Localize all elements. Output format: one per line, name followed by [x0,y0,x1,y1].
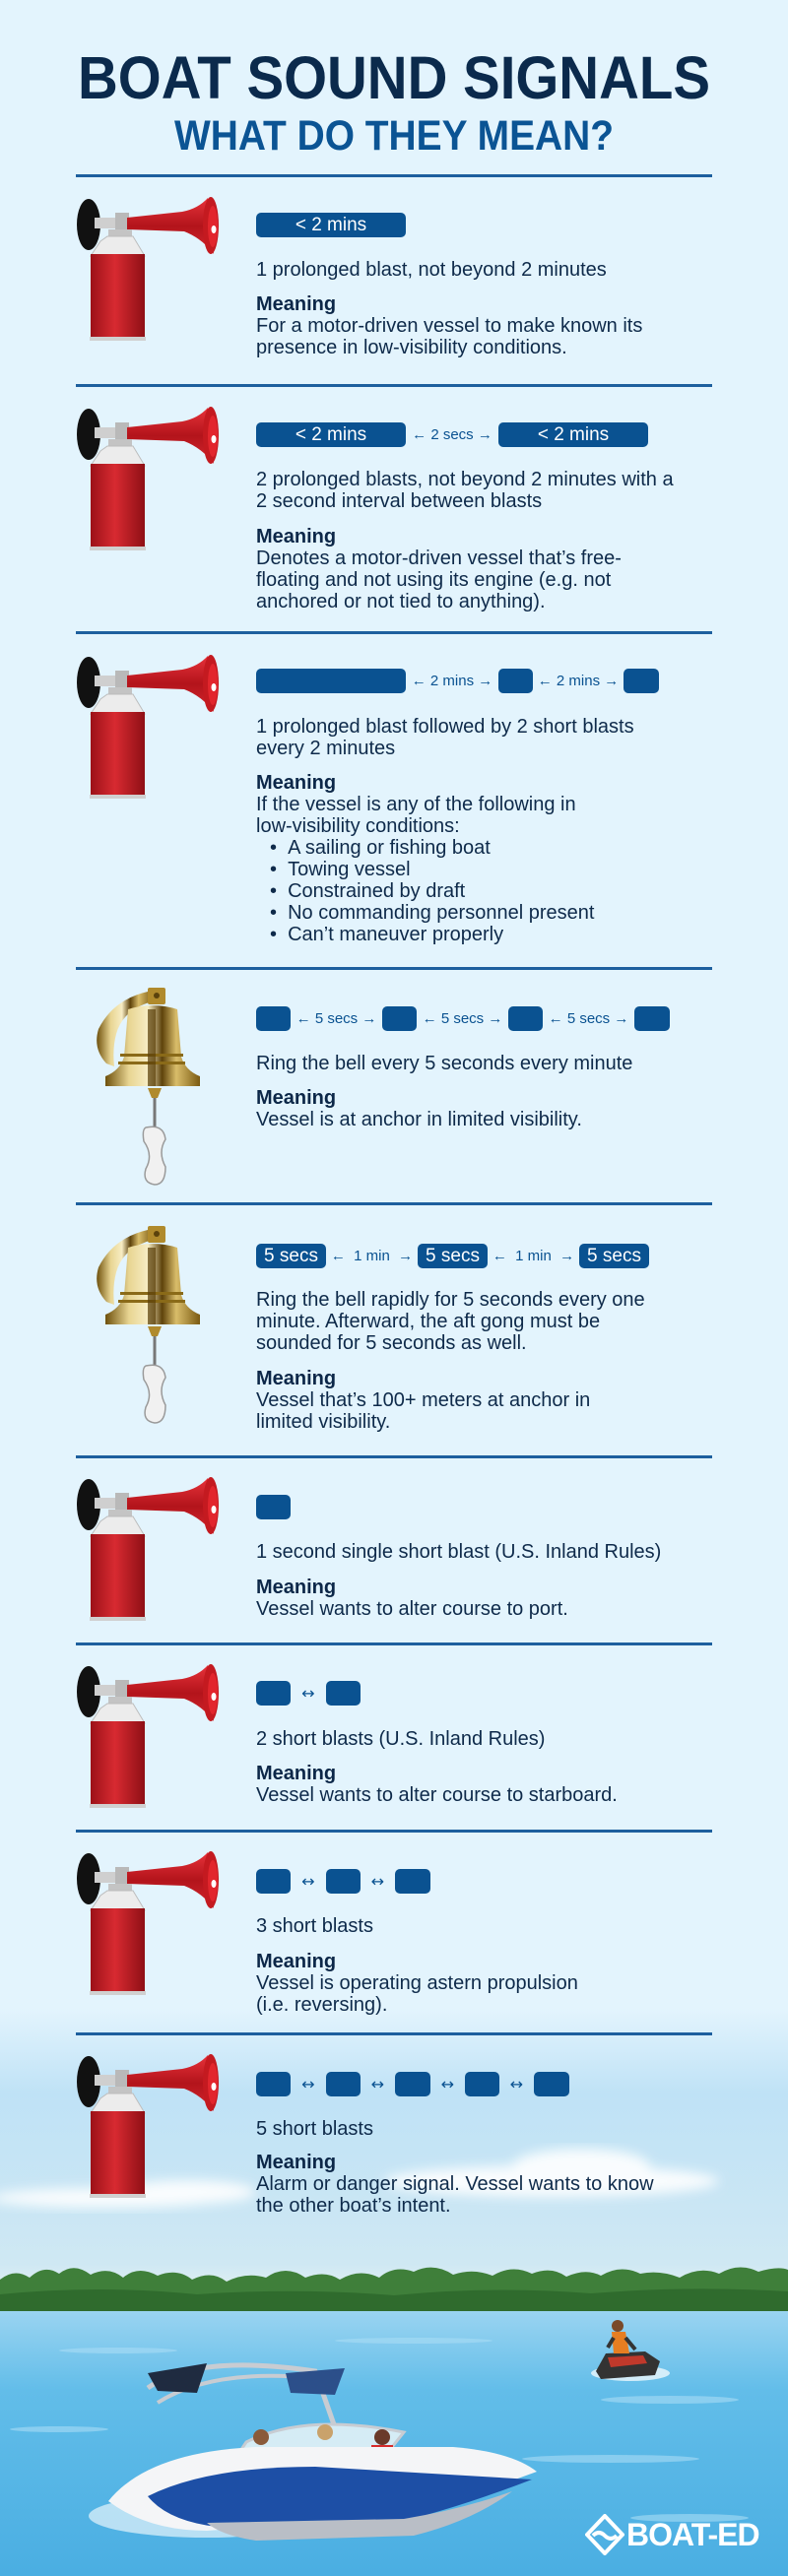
description: minute. Afterward, the aft gong must be [256,1311,600,1332]
icon: bell [97,1226,200,1424]
signal bars: ↔ [301,1684,315,1703]
description: 1 prolonged blast, not beyond 2 minutes [256,259,607,281]
signal bar [256,213,406,237]
signal bars: < 2 mins [538,424,609,445]
meaning: Meaning [256,293,336,315]
meaning: Meaning [256,1763,336,1784]
meaning: Vessel wants to alter course to port. [256,1598,568,1620]
meaning: Meaning [256,2152,336,2173]
description: 1 second single short blast (U.S. Inland Rules) [256,1541,661,1563]
signal bars: < 2 mins [296,424,366,445]
icon: air horn [77,197,219,341]
background sky scene [0,2029,788,2281]
icon: air horn [77,655,219,799]
panel: 3 short blasts [77,1851,578,2016]
description: Ring the bell rapidly for 5 seconds every one [256,1289,645,1311]
title: BOAT SOUND SIGNALS [78,44,710,111]
signal bars [256,1681,361,1706]
title [78,44,710,158]
signal bars: ← 5 secs → [549,1010,628,1027]
panel: bell rapidly + gong [97,1226,649,1433]
description: 3 short blasts [256,1915,373,1937]
signal bars: ↔ [371,1872,384,1891]
description [256,469,674,512]
meaning: anchored or not tied to anything). [256,591,546,612]
icon: air horn [77,1851,219,1995]
jet ski [591,2320,670,2381]
signal bars: ← 5 secs → [423,1010,502,1027]
signal bars [256,1244,649,1268]
signal bars [256,1869,430,1894]
signal bars: 5 secs [587,1246,641,1266]
signal bars: ↔ [510,2075,523,2093]
signal bars: 5 secs [264,1246,318,1266]
water [0,2311,788,2576]
signal bars: ← 1 min → [492,1248,574,1264]
signal bars: ← 2 mins → [538,673,619,689]
signal bars [256,1006,670,1031]
signal bars: ↔ [441,2075,454,2093]
meaning: Meaning [256,772,336,794]
icon: air horn [77,1664,219,1808]
meaning: (i.e. reversing). [256,1994,387,2016]
meaning [256,1951,578,2016]
meaning [256,293,642,358]
meaning: Vessel is operating astern propulsion [256,1972,578,1994]
meaning: • Constrained by draft [270,880,465,902]
meaning: Vessel is at anchor in limited visibility. [256,1109,582,1130]
meaning: Alarm or danger signal. Vessel wants to know [256,2173,654,2195]
panel: bell every 5 seconds [97,988,670,1186]
signal bars: ← 2 mins → [412,673,492,689]
description: 2 short blasts (U.S. Inland Rules) [256,1728,545,1750]
signal bars: ← 2 secs → [412,426,492,443]
signal bars [256,2072,571,2097]
icon: air horn [77,407,219,550]
signal bars: ← 5 secs → [296,1010,376,1027]
signal bars: 5 secs [426,1246,480,1266]
signal bar: < 2 mins [296,215,366,235]
meaning: If the vessel is any of the following in [256,794,576,815]
signal bars: ↔ [301,1872,315,1891]
meaning: Vessel wants to alter course to starboard. [256,1784,618,1806]
panel: 2 short blasts [77,1664,618,1808]
logo: BOAT-ED [585,2514,762,2555]
icon: air horn [76,2054,224,2202]
meaning [256,2152,654,2217]
description: every 2 minutes [256,738,395,759]
panel: 1 short blast [77,1477,661,1621]
panel: 2 prolonged blasts [77,407,674,612]
panel: 1 prolonged blast [77,197,642,358]
meaning: Meaning [256,1577,336,1598]
signal bars [256,422,648,447]
meaning: Meaning [256,1368,336,1389]
signal bars: ← 1 min → [331,1248,413,1264]
boat [89,2362,537,2541]
meaning [256,1087,582,1130]
meaning: • A sailing or fishing boat [270,837,491,859]
meaning: Denotes a motor-driven vessel that’s free- [256,547,622,569]
description: 5 short blasts [256,2118,373,2140]
meaning [256,1577,568,1620]
meaning: low-visibility conditions: [256,815,460,837]
description: 2 second interval between blasts [256,490,542,512]
signal bar [256,1495,291,1519]
meaning: Meaning [256,1951,336,1972]
description [256,1289,645,1354]
meaning: Vessel that’s 100+ meters at anchor in [256,1389,590,1411]
meaning [256,1763,618,1806]
signal bars: ↔ [371,2075,384,2093]
signal bars: ↔ [301,2075,315,2093]
meaning: Meaning [256,1087,336,1109]
description: 1 prolonged blast followed by 2 short blasts [256,716,634,738]
meaning: Meaning [256,526,336,547]
panel: prolonged + 2 short [77,655,659,945]
meaning: presence in low-visibility conditions. [256,337,567,358]
meaning: • No commanding personnel present [270,902,594,924]
logo: BOAT-ED: BOAT-ED [626,2517,759,2552]
meaning: limited visibility. [256,1411,390,1433]
meaning: • Can’t maneuver properly [270,924,503,945]
trees [0,2267,788,2311]
panel: 5 short blasts [77,2054,654,2217]
meaning [256,1368,590,1433]
signal bars [256,669,659,693]
icon: bell [97,988,200,1186]
icon: air horn [77,1477,219,1621]
meaning: the other boat’s intent. [256,2195,451,2217]
description: Ring the bell every 5 seconds every minute [256,1053,632,1074]
description: 2 prolonged blasts, not beyond 2 minutes with a [256,469,674,490]
meaning: floating and not using its engine (e.g. not [256,569,611,591]
meaning: For a motor-driven vessel to make known its [256,315,642,337]
meaning [256,526,622,612]
meaning: • Towing vessel [270,859,411,880]
description [256,716,634,759]
meaning [256,772,595,945]
description: sounded for 5 seconds as well. [256,1332,527,1354]
